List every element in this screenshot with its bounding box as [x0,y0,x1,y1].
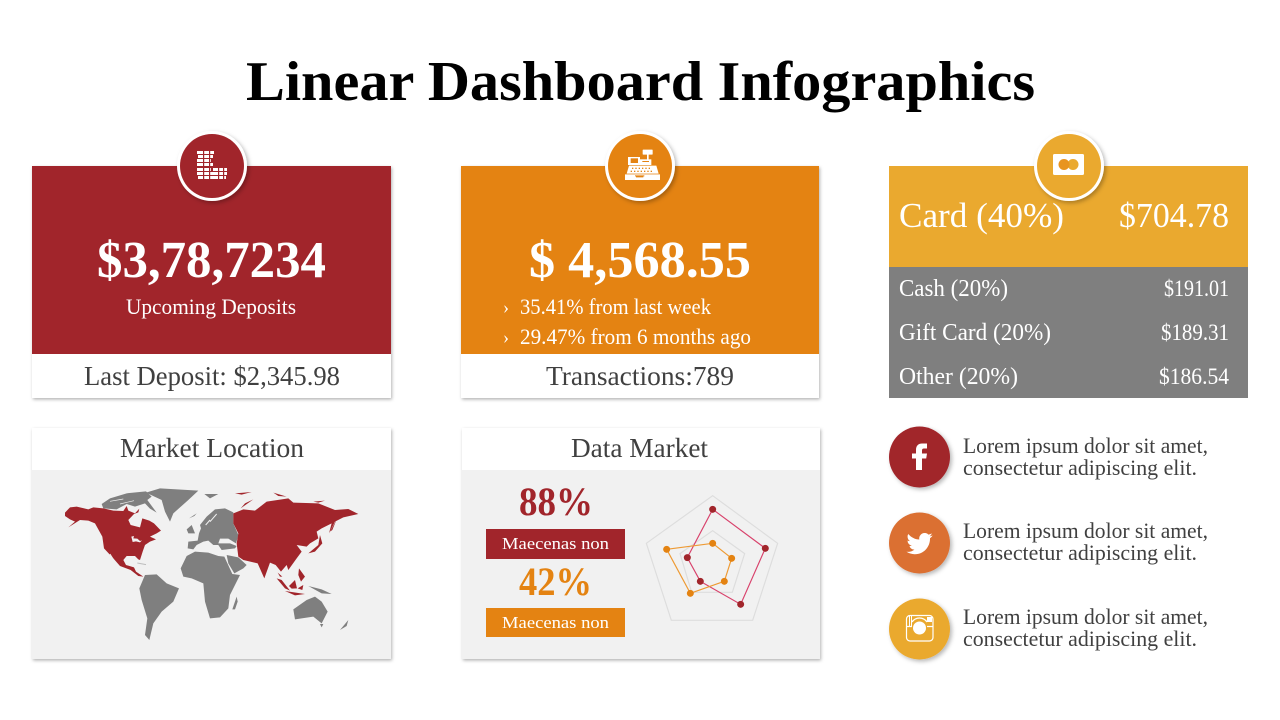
social text three: consectetur adipiscing elit. [963,626,1197,651]
panel: market location [32,428,391,659]
radar chart [646,496,778,620]
transactions: Transactions:789 [546,361,734,391]
icon: twitter [889,512,950,574]
icon: coins [177,131,247,201]
icon: instagram [889,598,950,660]
icon: credit card [1034,131,1104,201]
six month change: 29.47% from 6 months ago [520,324,751,349]
deposits label: Upcoming Deposits [126,294,296,319]
balance amount: $ 4,568.55 [529,232,751,289]
other amount: $186.54 [1159,364,1229,389]
stat 42 percent: 42% [519,559,592,604]
panel: payment breakdown [889,166,1248,398]
social text two [963,518,1208,565]
social text three [963,604,1208,651]
social text two: Lorem ipsum dolor sit amet, [963,518,1208,543]
social text one: consectetur adipiscing elit. [963,455,1197,480]
deposits amount: $3,78,7234 [97,232,326,289]
card label: Card (40%) [899,196,1064,235]
stat 88 percent: 88% [519,479,593,524]
social text one [963,433,1208,480]
icon: facebook [889,426,950,488]
label bar red: Maecenas non [502,534,610,553]
label bar orange: Maecenas non [502,613,610,632]
weekly change: 35.41% from last week [520,294,711,319]
panel: upcoming deposits [32,166,391,398]
panel: data market [462,428,820,659]
market location heading: Market Location [120,433,305,463]
social text three: Lorem ipsum dolor sit amet, [963,604,1208,629]
social text one: Lorem ipsum dolor sit amet, [963,433,1208,458]
bullet two: › [503,327,509,347]
gift card amount: $189.31 [1161,320,1229,345]
cash label: Cash (20%) [899,276,1008,302]
data market heading: Data Market [571,433,709,463]
other label: Other (20%) [899,364,1018,390]
title: Linear Dashboard Infographics [246,51,1035,113]
gift card label: Gift Card (20%) [899,320,1051,346]
panel: balance [461,166,819,398]
card amount: $704.78 [1119,196,1229,235]
bullet one: › [503,297,509,317]
social text two: consectetur adipiscing elit. [963,540,1197,565]
label bar orange [486,608,625,637]
label bar red [486,529,625,559]
cash amount: $191.01 [1164,276,1229,301]
icon: cash register [605,131,675,201]
last deposit: Last Deposit: $2,345.98 [84,361,340,391]
world map [65,488,358,640]
